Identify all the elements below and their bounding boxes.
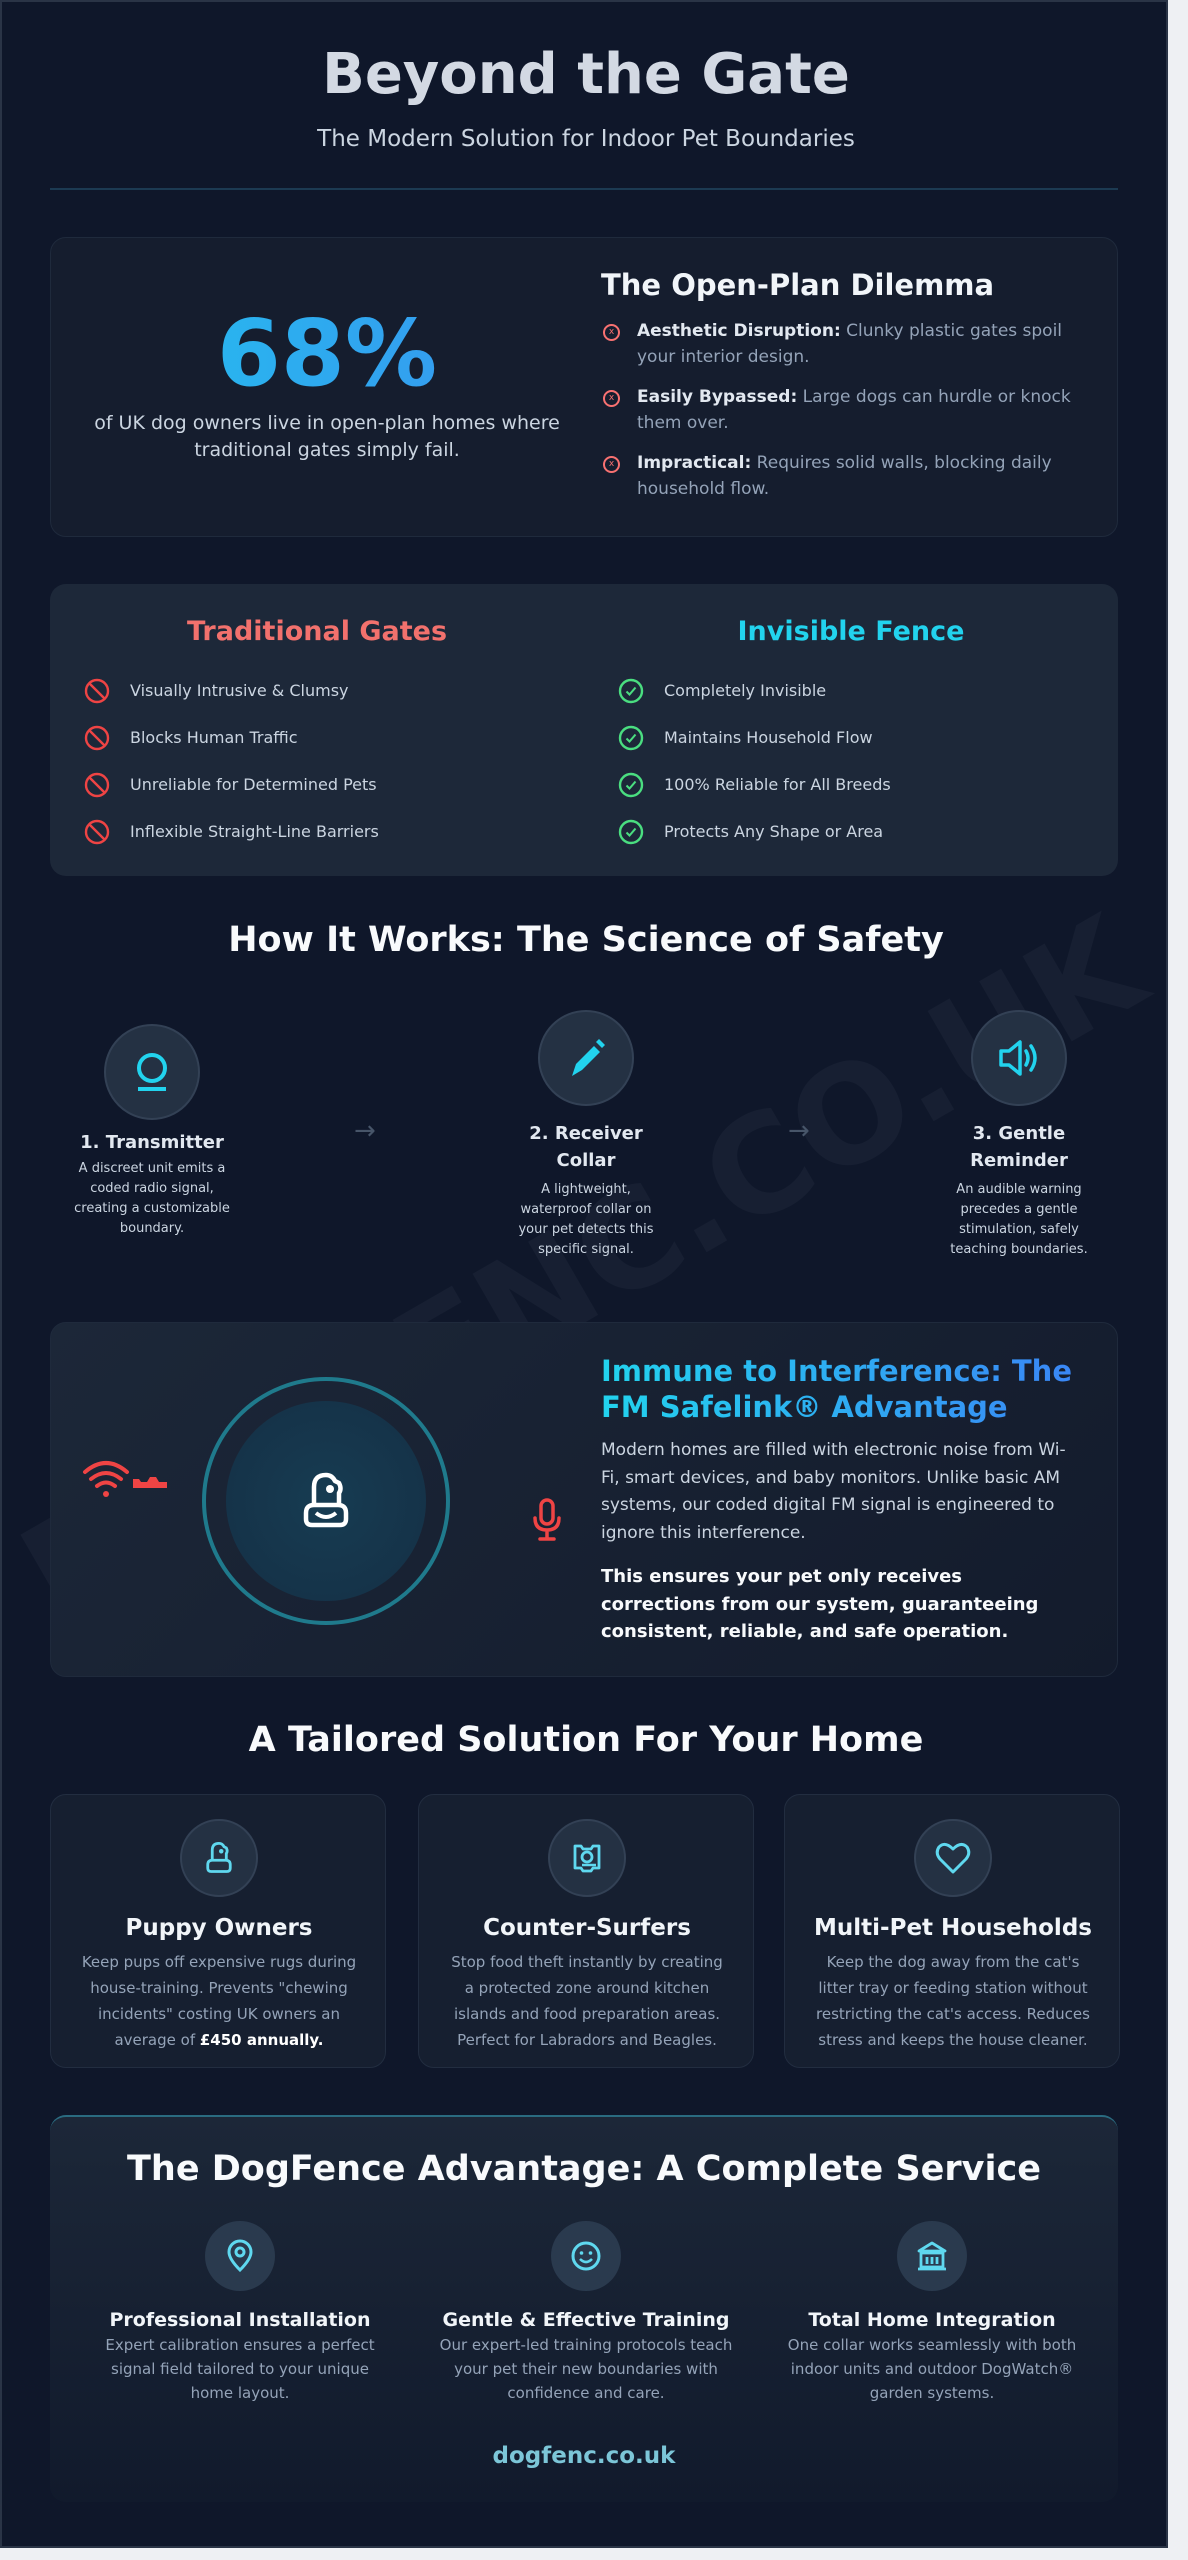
icon: smile xyxy=(551,2221,621,2291)
step 3: gentle reminder: An audible warning precedes a gentle stimulation, safely teaching boundaries. xyxy=(950,1182,1088,1257)
step 3: gentle reminder: Reminder xyxy=(970,1150,1068,1171)
feature: training xyxy=(440,2221,732,2402)
panel: comparison xyxy=(50,584,1118,876)
feature: installation xyxy=(105,2221,375,2402)
list: invisible: Protects Any Shape or Area xyxy=(664,822,883,841)
card: multi-pet: Multi-Pet Households xyxy=(814,1915,1092,1941)
panel: interference xyxy=(50,1322,1118,1677)
heading: invisible fence: Invisible Fence xyxy=(738,616,964,647)
dilemma list: Impractical: Requires solid walls, blocking daily household flow. xyxy=(637,453,1052,499)
list: traditional: Blocks Human Traffic xyxy=(130,728,298,747)
feature: installation: Professional Installation xyxy=(110,2309,370,2331)
arrow 2: → xyxy=(788,1116,810,1146)
card: counter-surfers xyxy=(418,1794,754,2068)
heading: immune to interference: Immune to Interference: The FM Safelink® Advantage xyxy=(601,1354,1072,1424)
feature: training: Gentle & Effective Training xyxy=(442,2309,730,2331)
card: multi-pet: Keep the dog away from the cat's litter tray or feeding station without restricting the cat's access. Reduces stress and keeps the house cleaner. xyxy=(816,1953,1090,2049)
interference emphasis: This ensures your pet only receives corrections from our system, guaranteeing consistent, reliable, and safe operation. xyxy=(601,1566,1038,1642)
list: traditional xyxy=(84,678,379,844)
list: traditional: Inflexible Straight-Line Barriers xyxy=(130,822,379,841)
feature: integration xyxy=(788,2221,1076,2402)
card: puppy owners xyxy=(50,1794,386,2068)
title: Beyond the Gate xyxy=(322,42,850,107)
arrow 1: → xyxy=(354,1116,376,1146)
stat 68%: 68% xyxy=(217,300,437,407)
feature: integration: Total Home Integration xyxy=(808,2309,1056,2331)
step 2: receiver collar: Collar xyxy=(557,1150,615,1171)
heading: advantage: The DogFence Advantage: A Complete Service xyxy=(127,2149,1041,2189)
step 1: transmitter: 1. Transmitter xyxy=(80,1132,224,1153)
feature: training: Our expert-led training protocols teach your pet their new boundaries with confidence and care. xyxy=(440,2336,732,2402)
heading: how it works: How It Works: The Science of Safety xyxy=(228,920,944,960)
heading: tailored solution: A Tailored Solution For Your Home xyxy=(249,1720,923,1760)
heading: dilemma: The Open-Plan Dilemma xyxy=(601,268,994,302)
card: multi-pet xyxy=(784,1794,1120,2068)
icon: counter xyxy=(548,1819,626,1897)
stat caption: of UK dog owners live in open-plan homes where traditional gates simply fail. xyxy=(94,412,560,461)
icon: puppy xyxy=(180,1819,258,1897)
card: counter-surfers: Stop food theft instantly by creating a protected zone around kitchen islands and food preparation areas. Perfect for Labradors and Beagles. xyxy=(451,1953,723,2049)
step 2: receiver collar: 2. Receiver xyxy=(529,1123,643,1144)
step 3: gentle reminder: 3. Gentle xyxy=(973,1123,1065,1144)
step 1: transmitter xyxy=(74,1024,230,1236)
list: invisible: 100% Reliable for All Breeds xyxy=(664,775,891,794)
icon: speaker xyxy=(971,1010,1067,1106)
dilemma list: Aesthetic Disruption: Clunky plastic gates spoil your interior design. xyxy=(637,321,1062,367)
list: traditional: Unreliable for Determined Pets xyxy=(130,775,377,794)
card: puppy owners: Puppy Owners xyxy=(126,1915,312,1941)
card: puppy owners: Keep pups off expensive rugs during house-training. Prevents "chewing incidents" costing UK owners an average of £450 annually. xyxy=(82,1953,356,2049)
stat 68% xyxy=(51,300,603,407)
subtitle: The Modern Solution for Indoor Pet Boundaries xyxy=(317,126,855,152)
step 2: receiver collar xyxy=(518,1010,654,1257)
website url: dogfenc.co.uk xyxy=(493,2443,675,2469)
interference body text: Modern homes are filled with electronic noise from Wi-Fi, smart devices, and baby monitors. Unlike basic AM systems, our coded digital FM signal is engineered to ignore this interference. xyxy=(601,1440,1066,1542)
dilemma list: Easily Bypassed: Large dogs can hurdle or knock them over. xyxy=(637,387,1071,433)
panel: dogfence advantage xyxy=(50,2115,1118,2502)
dilemma list xyxy=(603,321,1071,499)
step 1: transmitter: A discreet unit emits a coded radio signal, creating a customizable boundary. xyxy=(74,1161,230,1236)
icon: wifi noise xyxy=(82,1460,167,1497)
icon: building xyxy=(897,2221,967,2291)
icon: heart xyxy=(914,1819,992,1897)
icon: collar xyxy=(538,1010,634,1106)
icon: transmitter xyxy=(104,1024,200,1120)
feature: integration: One collar works seamlessly with both indoor units and outdoor DogWatch® garden systems. xyxy=(788,2336,1076,2402)
icon: location pin xyxy=(205,2221,275,2291)
list: traditional: Visually Intrusive & Clumsy xyxy=(130,681,349,700)
icon: microphone xyxy=(533,1498,561,1541)
list: invisible xyxy=(618,678,891,844)
feature: installation: Expert calibration ensures a perfect signal field tailored to your unique home layout. xyxy=(105,2336,375,2402)
dilemma list: x xyxy=(609,327,614,337)
step 2: receiver collar: A lightweight, waterproof collar on your pet detects this specific signal. xyxy=(518,1182,654,1257)
list: invisible: Completely Invisible xyxy=(664,681,826,700)
list: invisible: Maintains Household Flow xyxy=(664,728,873,747)
dilemma list: x xyxy=(609,459,614,469)
step 3: gentle reminder xyxy=(950,1010,1088,1257)
watermark: DOGFENC.CO.UK xyxy=(0,887,1168,1654)
card: counter-surfers: Counter-Surfers xyxy=(483,1915,691,1941)
panel: open-plan dilemma xyxy=(50,237,1118,537)
heading: traditional gates: Traditional Gates xyxy=(187,616,447,647)
icon: shield circle with dog xyxy=(202,1377,450,1625)
dilemma list: x xyxy=(609,393,614,403)
